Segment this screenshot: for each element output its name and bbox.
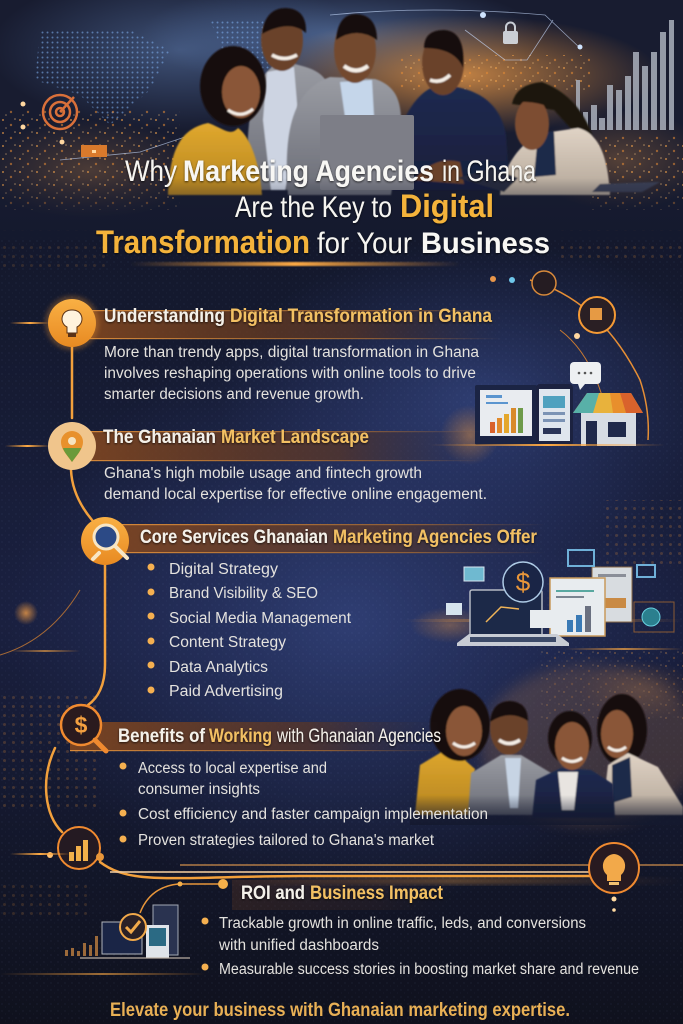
icon: map pin xyxy=(48,422,96,470)
connector: glowing spine linking sections xyxy=(46,347,600,878)
title: Transformation xyxy=(96,224,310,260)
icon: dollar magnifier xyxy=(61,705,106,751)
list of benefits xyxy=(120,760,488,849)
list of impacts xyxy=(202,915,639,978)
fade under hero xyxy=(0,178,683,240)
icon: orange briefcase xyxy=(81,145,107,157)
icon: dollar coin: $ xyxy=(516,567,531,597)
heading: Benefits of xyxy=(118,726,206,747)
person: woman in yellow xyxy=(415,689,490,815)
hero image: team collaborating over a laptop in front of a digital city xyxy=(0,0,683,240)
list of benefits: Cost efficiency and faster campaign implementation xyxy=(138,806,488,823)
footer call to action: Elevate your business with Ghanaian marketing expertise. xyxy=(110,1000,570,1021)
icon: phone xyxy=(536,384,573,446)
list of services: Social Media Management xyxy=(169,610,352,627)
icon: monitor with chart xyxy=(475,385,537,445)
person: woman in yellow xyxy=(168,46,266,195)
list of services: Paid Advertising xyxy=(169,683,283,700)
heading: ROI and xyxy=(241,883,305,904)
list of services: Data Analytics xyxy=(169,659,268,676)
person: man in grey suit, back left xyxy=(247,8,330,190)
panel: ROI and business impact xyxy=(202,880,639,978)
illustration: monitor, phone and shop xyxy=(430,362,665,465)
title xyxy=(96,155,550,260)
list of benefits: consumer insights xyxy=(138,781,260,798)
illustration: laptop, dollar coin and dashboards xyxy=(405,550,683,650)
title: Marketing Agencies xyxy=(183,155,434,188)
list of impacts: Trackable growth in online traffic, leds, and conversions xyxy=(219,915,586,932)
body text xyxy=(104,465,487,503)
person: woman in beige blazer xyxy=(597,694,683,815)
body text: Ghana's high mobile usage and fintech growth xyxy=(104,465,422,482)
heading xyxy=(241,883,444,904)
title: for Your xyxy=(317,227,412,260)
title: Business xyxy=(421,227,550,260)
person: man in grey suit xyxy=(468,701,555,815)
person: man in navy shirt xyxy=(388,30,510,190)
icon: magnifier xyxy=(81,517,129,565)
illustration: network nodes arc top right xyxy=(490,271,648,440)
panel: core services xyxy=(81,517,545,700)
heading xyxy=(140,527,538,548)
photo: four smiling team members xyxy=(410,665,683,825)
icon: light bulb xyxy=(45,296,99,350)
list of impacts: with unified dashboards xyxy=(218,937,379,954)
heading xyxy=(103,427,369,448)
body text: demand local expertise for effective online engagement. xyxy=(104,486,487,503)
heading: Marketing Agencies Offer xyxy=(333,527,538,548)
person: woman in beige blazer xyxy=(458,82,660,195)
title: Are the Key to xyxy=(235,191,392,224)
body text xyxy=(104,344,479,403)
list of benefits: Proven strategies tailored to Ghana's market xyxy=(138,832,435,849)
panel: Ghanaian market landscape xyxy=(48,422,487,503)
title: Why xyxy=(125,155,177,188)
list of impacts: Measurable success stories in boosting market share and revenue xyxy=(219,961,639,978)
icon: padlock xyxy=(503,22,518,44)
heading: Business Impact xyxy=(310,883,444,904)
heading: Core Services Ghanaian xyxy=(140,527,328,548)
heading: Market Landscape xyxy=(221,427,369,448)
heading xyxy=(104,306,492,327)
heading xyxy=(118,726,441,747)
icon: check badge xyxy=(120,914,146,940)
body text: smarter decisions and revenue growth. xyxy=(104,386,364,403)
title: Digital xyxy=(400,188,494,224)
heading: The Ghanaian xyxy=(103,427,216,448)
icon: brain light bulb badge xyxy=(589,843,639,912)
icon: bars chart top right xyxy=(576,20,674,130)
person: woman in navy blazer xyxy=(532,711,615,818)
hero backdrop: world map and city lights xyxy=(0,0,683,230)
panel: understanding digital transformation xyxy=(45,296,502,403)
icon: dollar coin xyxy=(503,562,543,602)
heading: Working xyxy=(209,726,272,747)
list of services: Content Strategy xyxy=(169,634,286,651)
body text: involves reshaping operations with online tools to drive xyxy=(104,365,476,382)
person: man in grey suit, centre xyxy=(287,14,401,195)
body text: More than trendy apps, digital transformation in Ghana xyxy=(104,344,479,361)
laptop xyxy=(320,115,414,190)
list of benefits: Access to local expertise and xyxy=(138,760,327,777)
icon: dollar magnifier: $ xyxy=(75,712,88,738)
icon: target xyxy=(43,95,77,129)
list of services xyxy=(148,561,352,700)
heading: with Ghanaian Agencies xyxy=(276,726,441,747)
heading: Understanding xyxy=(104,306,225,327)
icon: bar chart badge xyxy=(10,827,104,869)
list of services: Digital Strategy xyxy=(169,561,278,578)
heading: Digital Transformation in Ghana xyxy=(230,306,492,327)
illustration: devices with check mark xyxy=(0,879,228,975)
horizontal glow lines xyxy=(110,864,683,884)
icon: chat bubble xyxy=(570,362,601,390)
icon: shop storefront xyxy=(573,393,643,446)
panel: benefits xyxy=(61,705,488,849)
title: in Ghana xyxy=(442,155,536,188)
list of services: Brand Visibility & SEO xyxy=(169,585,318,602)
